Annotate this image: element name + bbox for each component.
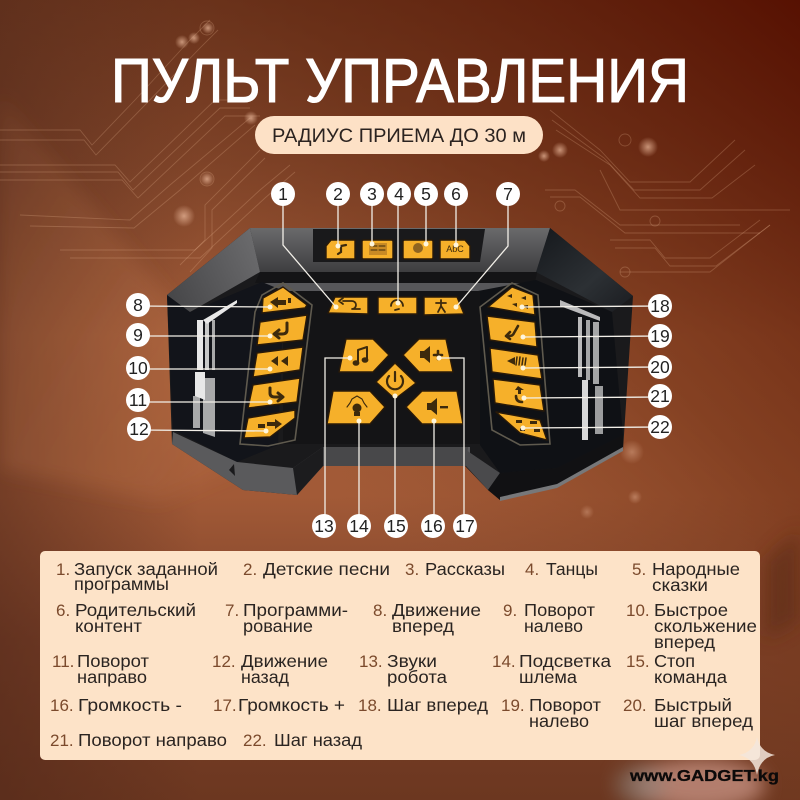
legend row 5: Шаг назад xyxy=(274,730,362,750)
callout 17: 17 xyxy=(455,516,475,536)
legend row 2: вперед xyxy=(654,632,715,652)
right column buttons xyxy=(487,287,547,440)
legend row 1: 1. xyxy=(56,560,70,579)
legend row 4: Громкость - xyxy=(78,695,182,715)
callout 4 xyxy=(387,182,411,306)
legend row 3: 12. xyxy=(212,652,236,671)
callout 17 xyxy=(436,356,477,538)
callout 22: 22 xyxy=(650,417,670,437)
button: folk tales xyxy=(403,240,433,259)
legend row 5: 21. xyxy=(50,731,74,750)
legend row 1: Рассказы xyxy=(425,559,505,579)
legend row 4: 16. xyxy=(50,696,74,715)
button: turn left 19 xyxy=(487,316,537,347)
callout 15 xyxy=(384,394,408,538)
legend row 2: контент xyxy=(75,616,142,636)
circuit traces: left xyxy=(0,20,295,272)
callout 1 xyxy=(271,182,338,310)
button: step forward xyxy=(488,287,535,315)
left decoration stripes xyxy=(193,300,237,437)
second row buttons xyxy=(328,297,464,315)
legend row 2: 7. xyxy=(225,601,239,620)
button: turn right xyxy=(248,378,300,408)
legend row 4: Поворот xyxy=(529,695,601,715)
button: power xyxy=(376,363,416,399)
legend row 2: скольжение xyxy=(654,616,757,636)
icon: sparkle xyxy=(739,737,775,775)
button: forward xyxy=(262,287,307,313)
centre buttons xyxy=(327,339,463,424)
legend row 3: робота xyxy=(387,667,447,687)
legend row 2: 9. xyxy=(503,601,517,620)
callout 7 xyxy=(454,182,520,310)
button: step back xyxy=(496,412,547,440)
legend row 3: Подсветка xyxy=(519,651,611,671)
legend row 1: Танцы xyxy=(546,559,598,579)
button: songs xyxy=(326,240,355,259)
legend row 4: Шаг вперед xyxy=(387,695,488,715)
callout 5 xyxy=(414,182,438,246)
callout 11: 11 xyxy=(129,390,147,410)
callout 21: 21 xyxy=(650,386,670,406)
legend row 2: 6. xyxy=(56,601,70,620)
legend row 2: Быстрое xyxy=(654,600,728,620)
legend row 4: 18. xyxy=(358,696,382,715)
legend row 3: направо xyxy=(77,667,147,687)
legend row 2: Родительский xyxy=(75,600,196,620)
legend row 3: Движение xyxy=(241,651,328,671)
legend row 4 xyxy=(50,695,753,731)
legend row 1: 2. xyxy=(243,560,257,579)
legend row 3: Поворот xyxy=(77,651,149,671)
callout 10: 10 xyxy=(128,358,148,378)
remote control xyxy=(167,228,633,501)
side panel surrounds xyxy=(240,283,550,446)
legend row 1: программы xyxy=(74,574,169,594)
legend row 1: 3. xyxy=(405,560,419,579)
circuit traces: right xyxy=(538,110,790,519)
left column buttons xyxy=(244,287,307,438)
button: back xyxy=(244,410,295,438)
legend row 3: Стоп xyxy=(654,651,695,671)
legend row 4: шаг вперед xyxy=(654,711,753,731)
button: fast forward xyxy=(253,347,303,377)
subtitle pill xyxy=(255,116,543,154)
legend row 4: Громкость + xyxy=(238,695,345,715)
legend row 4: налево xyxy=(529,711,589,731)
title: ПУЛЬТ УПРАВЛЕНИЯ xyxy=(111,47,689,116)
callout 3: 3 xyxy=(367,184,377,204)
callout 16 xyxy=(421,418,445,538)
legend row 2: 10. xyxy=(626,601,650,620)
legend row 4: 19. xyxy=(501,696,525,715)
legend row 1: сказки xyxy=(652,575,708,595)
legend row 3: 11. xyxy=(52,652,74,671)
legend row 2: Поворот xyxy=(524,600,595,620)
callout lines and number badges xyxy=(126,182,672,538)
legend row 3: назад xyxy=(241,667,289,687)
button: volume down xyxy=(406,391,463,424)
legend row 1: Запуск заданной xyxy=(74,559,218,579)
button: parental content: AbC xyxy=(446,244,464,254)
callout 9: 9 xyxy=(133,325,143,345)
legend row 2 xyxy=(56,600,757,652)
legend row 3: Звуки xyxy=(387,651,437,671)
callout 14 xyxy=(347,418,371,538)
subtitle pill: РАДИУС ПРИЕМА ДО 30 м xyxy=(272,126,526,147)
callout 10 xyxy=(126,356,272,380)
callout 16: 16 xyxy=(423,516,443,536)
callout 3 xyxy=(360,182,384,246)
callout 22 xyxy=(520,415,672,439)
top row buttons xyxy=(326,240,470,259)
callout 9 xyxy=(126,323,272,347)
callout 6: 6 xyxy=(451,184,461,204)
button: robot sounds xyxy=(339,339,389,372)
legend row 3: 14. xyxy=(492,652,516,671)
callout 6 xyxy=(444,182,468,248)
callout 11 xyxy=(126,388,272,412)
legend row 3 xyxy=(52,651,727,687)
button: parental content xyxy=(440,240,470,259)
callout 15: 15 xyxy=(386,516,406,536)
button: turn left xyxy=(257,315,307,345)
callout 12 xyxy=(127,417,268,441)
legend row 4: Быстрый xyxy=(654,695,732,715)
callout 7: 7 xyxy=(503,184,513,204)
legend row 3: 15. xyxy=(626,652,650,671)
callout 12: 12 xyxy=(129,419,149,439)
legend row 3: шлема xyxy=(519,667,577,687)
brand url: www.GADGET.kg xyxy=(629,768,779,785)
callout 13: 13 xyxy=(314,516,334,536)
button: turn right 21 xyxy=(493,379,544,411)
legend row 2: рование xyxy=(243,616,313,636)
legend row 1: Народные xyxy=(652,559,740,579)
legend row 5: Поворот направо xyxy=(78,730,227,750)
legend row 5 xyxy=(50,730,362,750)
legend row 4: 20. xyxy=(623,696,647,715)
button: fast step xyxy=(490,348,542,379)
legend row 3: команда xyxy=(654,667,727,687)
legend row 2: вперед xyxy=(392,616,454,636)
remote body xyxy=(167,228,633,501)
legend row 1: 4. xyxy=(525,560,539,579)
button: dance xyxy=(378,297,417,314)
legend row 2: 8. xyxy=(373,601,387,620)
button: volume up xyxy=(403,339,453,372)
button: stories xyxy=(362,240,393,259)
callout 13 xyxy=(312,356,352,538)
legend row 1 xyxy=(56,559,740,595)
legend row 2: Движение xyxy=(392,600,481,620)
legend row 2: Программи- xyxy=(243,600,348,620)
legend row 4: 17. xyxy=(213,696,237,715)
callout 19 xyxy=(520,324,672,348)
button: helmet light xyxy=(327,391,385,424)
button: program xyxy=(328,297,368,314)
callout 8 xyxy=(126,293,272,317)
legend row 3: 13. xyxy=(359,652,383,671)
right decoration stripes xyxy=(560,300,603,440)
legend row 2: налево xyxy=(524,616,583,636)
legend panel xyxy=(40,551,760,760)
callout 14: 14 xyxy=(349,516,369,536)
callout 8: 8 xyxy=(133,295,143,315)
callout 5: 5 xyxy=(421,184,431,204)
legend row 1: Детские песни xyxy=(263,559,390,579)
callout 18: 18 xyxy=(650,296,670,316)
callout 20: 20 xyxy=(650,357,670,377)
callout 2: 2 xyxy=(333,184,343,204)
callout 1: 1 xyxy=(278,184,288,204)
callout 2 xyxy=(326,182,350,248)
callout 18 xyxy=(520,294,672,318)
callout 19: 19 xyxy=(650,326,670,346)
callout 21 xyxy=(522,384,672,408)
legend row 5: 22. xyxy=(243,731,267,750)
legend row 1: 5. xyxy=(632,560,646,579)
button: programming xyxy=(424,297,464,315)
callout 20 xyxy=(520,355,672,379)
callout 4: 4 xyxy=(394,184,404,204)
